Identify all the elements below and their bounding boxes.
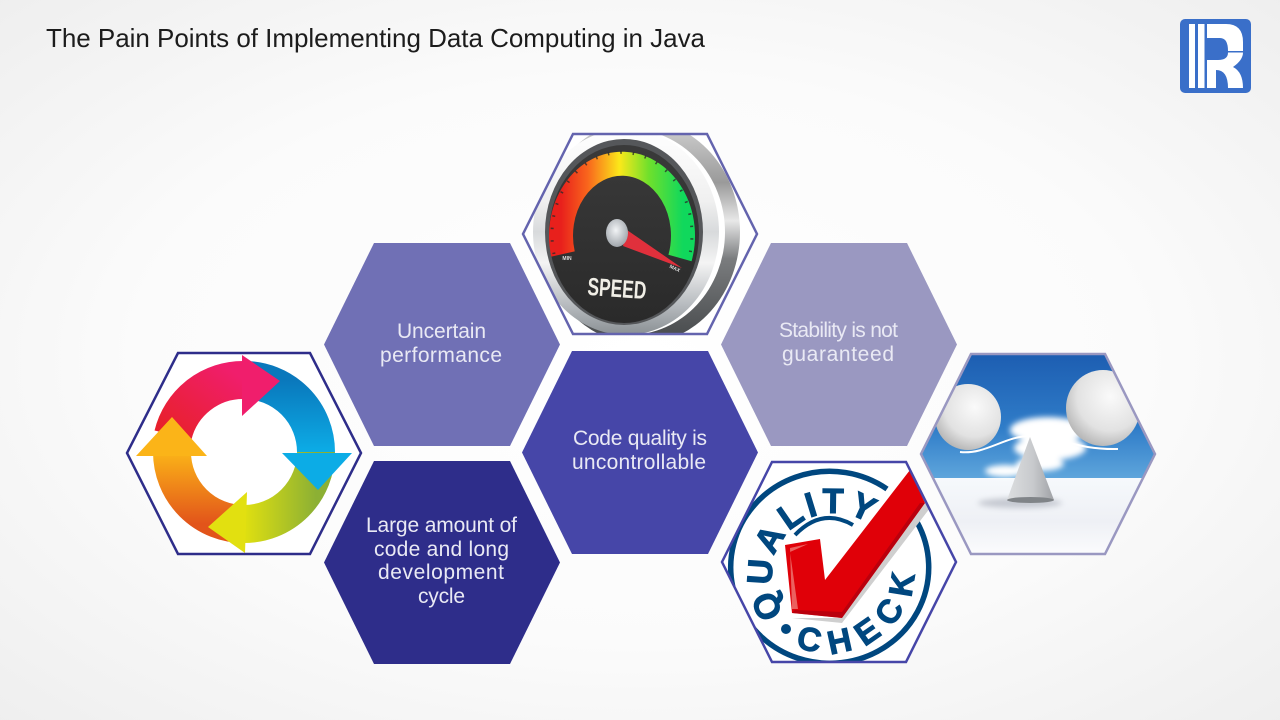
needle bbox=[623, 230, 682, 268]
gauge labels: SPEED bbox=[587, 273, 647, 305]
hexagon: stability not guaranteed bbox=[721, 243, 957, 446]
hexagon: uncertain performance: Uncertain bbox=[397, 320, 486, 343]
hexagon: large amount of code bbox=[324, 461, 560, 664]
hexagon: large amount of code: development bbox=[378, 561, 504, 584]
title: The Pain Points of Implementing Data Computing in Java bbox=[46, 23, 706, 53]
hexagon: uncertain performance bbox=[324, 243, 560, 446]
icon: quality check stamp hexagon: QUALITY bbox=[746, 488, 880, 620]
cone bbox=[1007, 437, 1054, 500]
icon: speed gauge hexagon bbox=[523, 120, 757, 344]
logo bbox=[1180, 19, 1251, 93]
hexagon: large amount of code: cycle bbox=[418, 585, 465, 608]
right ball bbox=[1066, 370, 1140, 446]
icon: quality check stamp hexagon bbox=[720, 460, 958, 664]
hexagon: code quality uncontrollable: uncontrollable bbox=[572, 451, 706, 474]
hexagon: stability not guaranteed: guaranteed bbox=[782, 343, 894, 366]
hexagon: code quality uncontrollable bbox=[522, 351, 758, 554]
icon: cycle arrows hexagon bbox=[127, 353, 361, 554]
balance beam bbox=[960, 436, 1118, 452]
hub bbox=[606, 219, 628, 247]
hexagon: code quality uncontrollable: Code quality is bbox=[573, 427, 707, 450]
icon: speed gauge hexagon: MIN bbox=[562, 256, 572, 262]
icon: balance scale photo hexagon bbox=[915, 350, 1160, 558]
icon: speed gauge hexagon: MAX bbox=[668, 264, 681, 274]
hexagon: large amount of code: code and long bbox=[374, 538, 509, 561]
hexagon: uncertain performance: performance bbox=[380, 344, 502, 367]
left ball bbox=[935, 384, 1001, 450]
hexagon: large amount of code: Large amount of bbox=[366, 514, 517, 537]
hexagon: stability not guaranteed: Stability is not bbox=[779, 319, 898, 342]
icon: quality check stamp hexagon: CHECK bbox=[798, 570, 916, 655]
